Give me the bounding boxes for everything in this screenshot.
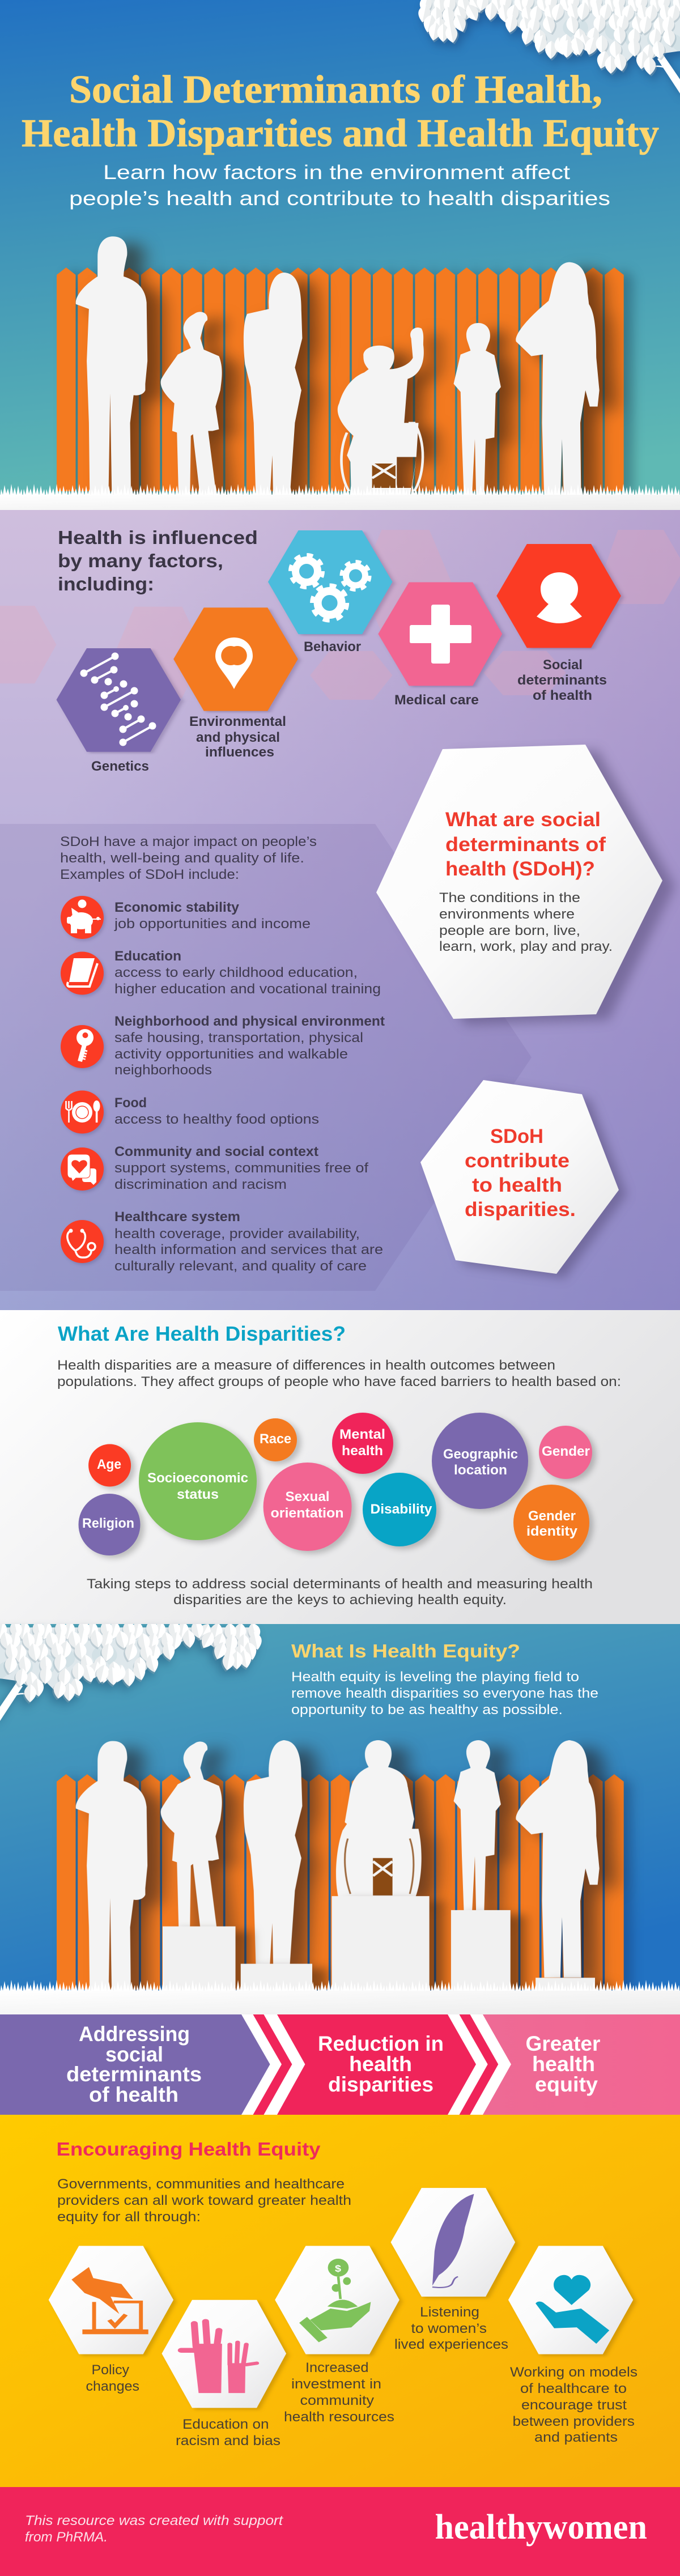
- factor: environmental and physical influences: and physical: [196, 730, 280, 745]
- heading: health is influenced: by many factors,: [58, 550, 223, 571]
- item: community and social context: Community and social context: [114, 1144, 318, 1159]
- panel: footer: [0, 2487, 680, 2576]
- icon: raised hands: [181, 2322, 257, 2393]
- text: sponsorship note: from PhRMA.: [25, 2530, 108, 2545]
- item: education: [61, 949, 381, 997]
- panel: what are health disparities: [0, 1310, 680, 1625]
- item: healthcare system: Healthcare system: [114, 1209, 240, 1225]
- callout: SDoH contribute to health disparities: [420, 1080, 619, 1274]
- text: disparities definition: [57, 1358, 621, 1389]
- bubble: socioeconomic status: [139, 1422, 257, 1540]
- icon: hand growing money plant: [299, 2259, 371, 2343]
- item: community and social context: discrimination and racism: [114, 1177, 287, 1192]
- heading: what are health disparities: What Are Health Disparities?: [58, 1322, 346, 1345]
- item: healthcare system: culturally relevant, and quality of care: [114, 1259, 367, 1274]
- panel: SDoH examples arrow: [0, 824, 532, 1291]
- item: education: access to early childhood education,: [114, 965, 358, 980]
- arrow: greater health equity: health: [532, 2052, 595, 2076]
- item: community and social context: support systems, communities free of: [114, 1161, 368, 1176]
- panel: encouraging health equity: [0, 2115, 680, 2487]
- callout: SDoH contribute to health disparities: disparities.: [465, 1198, 576, 1221]
- text: sponsorship note: [25, 2513, 283, 2545]
- panel: what is health equity: [0, 1619, 680, 2014]
- item: economic stability: [61, 896, 311, 939]
- illustration: people on pedestals all seeing over the fence: [76, 1740, 600, 2004]
- bubble: disability: [363, 1473, 436, 1546]
- text: disparities definition: Health disparities are a measure of differences in health outcomes between: [57, 1358, 555, 1373]
- bubble: gender identity: [513, 1485, 589, 1561]
- factor: medical care: [378, 583, 502, 708]
- arrow: addressing social determinants of health: determinants: [66, 2063, 202, 2086]
- bubble: sexual orientation: orientation: [271, 1506, 343, 1521]
- illustration: orange picket fence: [57, 1774, 624, 1990]
- bubble: disability: Disability: [371, 1502, 432, 1517]
- bubble: race: [254, 1418, 297, 1461]
- step: increased investment: health resources: [284, 2409, 394, 2425]
- arrow: reduction in health disparities: Reduction in: [318, 2032, 444, 2055]
- step: working on models of healthcare: of healthcare to: [520, 2381, 627, 2396]
- factor: environmental and physical influences: [173, 607, 298, 760]
- arrow: addressing social determinants of health: [0, 2014, 270, 2115]
- illustration: white paper tree mirrored: [0, 1619, 264, 1721]
- illustration: white grass: [0, 1979, 680, 2014]
- callout: what are social determinants of health: learn, work, play and pray.: [439, 939, 613, 954]
- bubble: age: Age: [97, 1457, 121, 1472]
- bubble: age: [88, 1444, 131, 1487]
- title: Health Disparities and Health Equity: [22, 112, 659, 155]
- factor: medical care: Medical care: [394, 692, 479, 708]
- icon: book: [61, 952, 104, 995]
- icon: chat bubbles with heart: [61, 1147, 104, 1191]
- callout: SDoH contribute to health disparities: to health: [472, 1174, 562, 1196]
- factor: social determinants of health: of health: [533, 688, 592, 703]
- icon: plus: [410, 605, 471, 664]
- title: [22, 68, 659, 155]
- factor: environmental and physical influences: Environmental: [189, 714, 286, 729]
- step: policy changes: changes: [86, 2379, 139, 2394]
- item: neighborhood and physical environment: Neighborhood and physical environment: [114, 1014, 385, 1029]
- illustration: white pedestals of different heights: [163, 1896, 595, 1995]
- factor: social determinants of health: [496, 544, 621, 703]
- text: encouraging intro: Governments, communities and healthcare: [57, 2177, 345, 2192]
- arrow: addressing social determinants of health: Addressing: [79, 2022, 190, 2046]
- text: sponsorship note: This resource was created with support: [25, 2513, 283, 2528]
- item: neighborhood and physical environment: [61, 1014, 385, 1078]
- item: food: [61, 1090, 319, 1133]
- factor: genetics: Genetics: [91, 759, 149, 774]
- step: working on models of healthcare: between providers: [512, 2414, 635, 2429]
- bubble: race: Race: [260, 1431, 291, 1447]
- item: education: Education: [114, 949, 181, 964]
- item: community and social context: [61, 1144, 368, 1192]
- bubble: sexual orientation: [264, 1463, 352, 1551]
- heading: health is influenced: Health is influenced: [58, 527, 258, 548]
- arrow: reduction in health disparities: disparities: [328, 2073, 434, 2096]
- arrow: addressing social determinants of health: of health: [89, 2083, 178, 2106]
- step: listening to women: Listening: [420, 2305, 479, 2320]
- step: increased investment: Increased: [305, 2360, 368, 2375]
- item: neighborhood and physical environment: activity opportunities and walkable: [114, 1047, 348, 1062]
- step: working on models of healthcare: Working on models: [510, 2365, 638, 2380]
- item: healthcare system: health coverage, provider availability,: [114, 1226, 360, 1242]
- text: health equity definition: [291, 1669, 598, 1718]
- step: policy changes: [49, 2246, 173, 2394]
- text: SDoH intro: SDoH have a major impact on people’s: [60, 834, 317, 849]
- logo: healthywomen: healthywomen: [435, 2508, 647, 2547]
- step: education on racism and bias: [162, 2300, 286, 2449]
- subtitle: [69, 161, 610, 210]
- icon: gears: [290, 555, 369, 620]
- item: neighborhood and physical environment: safe housing, transportation, physical: [114, 1030, 363, 1045]
- text: encouraging intro: providers can all work toward greater health: [57, 2193, 351, 2208]
- item: food: access to healthy food options: [114, 1112, 319, 1127]
- bubble: gender: Gender: [542, 1444, 590, 1459]
- bubble: religion: [78, 1494, 141, 1555]
- heading: health is influenced: including:: [58, 573, 154, 594]
- bubble: gender: [539, 1426, 592, 1479]
- text: health equity definition: opportunity to be as healthy as possible.: [291, 1702, 563, 1718]
- arrow: addressing social determinants of health: social: [105, 2043, 163, 2066]
- arrow: greater health equity: Greater: [526, 2032, 601, 2055]
- step: policy changes: Policy: [92, 2362, 129, 2378]
- arrow: greater health equity: equity: [535, 2073, 598, 2096]
- item: economic stability: Economic stability: [114, 900, 240, 915]
- arrow: reduction in health disparities: health: [349, 2052, 412, 2076]
- item: healthcare system: [61, 1209, 383, 1274]
- bubble: gender identity: Gender: [528, 1508, 576, 1524]
- step: listening to women: [391, 2188, 515, 2352]
- chart: bubble cluster of disparity factors: [78, 1413, 592, 1561]
- text: taking steps: [87, 1576, 593, 1608]
- bubble: socioeconomic status: Socioeconomic: [147, 1470, 248, 1486]
- text: taking steps: Taking steps to address social determinants of health and measuring health: [87, 1576, 593, 1592]
- callout: what are social determinants of health: environments where: [439, 907, 575, 922]
- item: economic stability: job opportunities and income: [114, 916, 311, 932]
- step: listening to women: lived experiences: [394, 2337, 508, 2352]
- heading: what is health equity: What Is Health Equity?: [291, 1640, 520, 1661]
- bubble: geographic location: Geographic: [443, 1447, 518, 1462]
- text: SDoH intro: Examples of SDoH include:: [60, 867, 239, 882]
- factor: social determinants of health: Social: [543, 657, 583, 673]
- item: healthcare system: health information and services that are: [114, 1242, 383, 1257]
- panel: header: [0, 0, 680, 510]
- heading: encouraging health equity: Encouraging Health Equity: [57, 2139, 321, 2160]
- icon: plate and cutlery: [61, 1090, 104, 1133]
- icon: piggy bank: [61, 896, 104, 939]
- step: increased investment: [275, 2246, 400, 2425]
- text: SDoH intro: health, well-being and quality of life.: [60, 851, 304, 866]
- factor: behavior: [268, 530, 393, 654]
- step: working on models of healthcare: encourage trust: [521, 2398, 627, 2413]
- text: encouraging intro: equity for all through:: [57, 2209, 201, 2225]
- callout: what are social determinants of health: health (SDoH)?: [445, 858, 595, 880]
- step: education on racism and bias: Education on: [182, 2417, 269, 2432]
- icon: map pin: [215, 637, 253, 689]
- step: working on models of healthcare: and patients: [534, 2430, 618, 2445]
- icon: feather quill: [432, 2194, 474, 2288]
- icon: DNA strand: [80, 653, 156, 746]
- bubble: gender identity: identity: [526, 1524, 578, 1539]
- illustration: white paper tree: [416, 0, 680, 93]
- step: increased investment: $: [335, 2263, 342, 2274]
- step: education on racism and bias: racism and bias: [176, 2433, 280, 2449]
- callout: SDoH contribute to health disparities: SDoH: [490, 1125, 543, 1147]
- heading: health is influenced: [58, 527, 258, 594]
- illustration: people silhouettes against the fence, some unable to see over: [76, 236, 600, 499]
- icon: stethoscope: [61, 1220, 104, 1263]
- step: increased investment: investment in: [291, 2377, 381, 2392]
- item: education: higher education and vocational training: [114, 981, 381, 997]
- factor: environmental and physical influences: influences: [205, 745, 274, 760]
- step: listening to women: to women’s: [411, 2321, 487, 2336]
- bubble: mental health: [332, 1413, 393, 1474]
- panel: chevron progression banner: [0, 2014, 680, 2115]
- callout: what are social determinants of health: The conditions in the: [439, 890, 580, 906]
- icon: key: [61, 1025, 104, 1068]
- callout: what are social determinants of health: [376, 745, 662, 1019]
- icon: hand holding heart: [536, 2275, 609, 2344]
- illustration: white grass: [0, 483, 680, 510]
- factor: genetics: [56, 648, 181, 774]
- callout: what are social determinants of health: determinants of: [445, 834, 606, 856]
- bubble: religion: Religion: [82, 1516, 134, 1531]
- bubble: mental health: Mental: [339, 1427, 385, 1442]
- bubble: geographic location: [432, 1413, 528, 1509]
- step: increased investment: community: [300, 2393, 374, 2408]
- text: health equity definition: Health equity is leveling the playing field to: [291, 1669, 579, 1685]
- callout: what are social determinants of health: What are social: [445, 809, 601, 831]
- title: Social Determinants of Health,: [69, 68, 602, 112]
- factor: behavior: Behavior: [304, 639, 361, 654]
- text: encouraging intro: [57, 2177, 351, 2225]
- bubble: socioeconomic status: status: [177, 1487, 219, 1502]
- subtitle: people’s health and contribute to health disparities: [69, 188, 610, 210]
- step: working on models of healthcare: [508, 2246, 638, 2445]
- factor: social determinants of health: determinants: [517, 673, 607, 688]
- text: disparities definition: populations. They affect groups of people who have faced barriers to health based on:: [57, 1374, 621, 1389]
- arrow: greater health equity: [483, 2014, 680, 2115]
- illustration: orange picket fence: [57, 267, 624, 491]
- callout: SDoH contribute to health disparities: contribute: [465, 1150, 570, 1172]
- text: taking steps: disparities are the keys to achieving health equity.: [173, 1592, 507, 1608]
- callout: what are social determinants of health: people are born, live,: [439, 923, 580, 938]
- bubble: sexual orientation: Sexual: [286, 1489, 330, 1504]
- subtitle: Learn how factors in the environment affect: [103, 161, 570, 184]
- item: neighborhood and physical environment: neighborhoods: [114, 1062, 212, 1078]
- icon: hand casting ballot: [71, 2267, 148, 2334]
- text: SDoH intro: [60, 834, 317, 882]
- bubble: mental health: health: [342, 1443, 383, 1459]
- bubble: geographic location: location: [454, 1463, 507, 1478]
- text: health equity definition: remove health disparities so everyone has the: [291, 1686, 598, 1701]
- arrow: reduction in health disparities: [277, 2014, 476, 2115]
- item: food: Food: [114, 1095, 147, 1111]
- icon: person bust: [537, 572, 582, 623]
